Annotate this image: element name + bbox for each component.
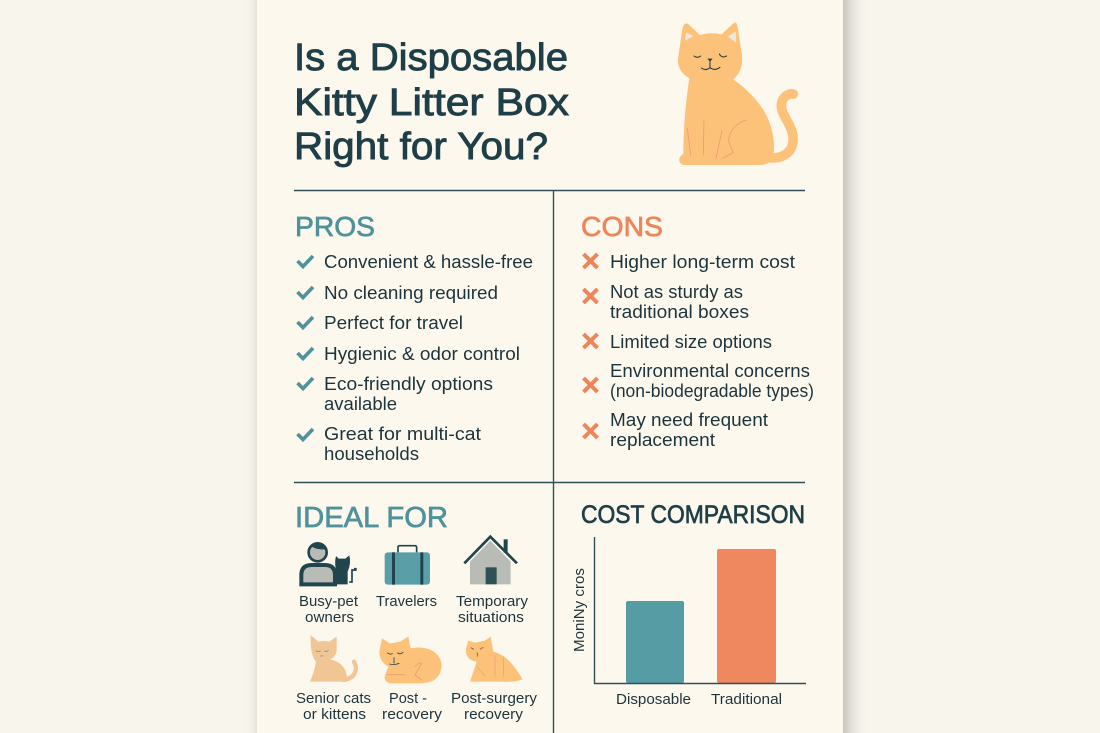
cons heading: CONS (581, 211, 663, 242)
icon: sitting cat (678, 22, 793, 165)
x axis labels: Disposable (616, 691, 691, 708)
ideal for labels: recovery (464, 706, 523, 723)
icon: resting cat (379, 637, 442, 683)
cost comparison heading: COST COMPARISON (581, 501, 805, 529)
cons list: (non-biodegradable types) (610, 381, 814, 401)
cons list: Higher long-term cost (610, 252, 795, 272)
pros list: available (324, 394, 397, 414)
ideal for labels: Temporary (456, 593, 529, 610)
ideal for labels: owners (305, 609, 354, 626)
title: Is a Disposable (294, 37, 568, 79)
pros list: Eco-friendly options (324, 374, 493, 394)
ideal for labels: situations (458, 609, 524, 626)
y axis label: MoniNy cros (571, 568, 588, 652)
icon: house (464, 537, 517, 584)
dividers (294, 190, 805, 733)
ideal for labels (296, 593, 538, 723)
cons list: traditional boxes (610, 302, 749, 322)
title (294, 37, 569, 168)
title: Right for You? (294, 126, 548, 168)
cons list: Environmental concerns (610, 361, 810, 381)
panel: cons (581, 211, 814, 450)
panel: ideal for (295, 502, 538, 723)
panel: pros (295, 211, 533, 464)
ideal for labels: Post-surgery (451, 690, 538, 707)
ideal for heading: IDEAL FOR (295, 502, 448, 534)
pros checkmarks (298, 256, 313, 440)
cons list: May need frequent (610, 410, 768, 430)
bar: disposable (626, 601, 684, 683)
ideal for labels: Busy-pet (299, 593, 359, 610)
ideal for labels: Post - (389, 690, 427, 707)
x axis labels (616, 691, 782, 708)
x axis labels: Traditional (711, 691, 782, 708)
pros list: Perfect for travel (324, 313, 463, 333)
cons list: replacement (610, 430, 715, 450)
bar: traditional (717, 549, 776, 683)
pros heading: PROS (295, 211, 375, 242)
pros list: Great for multi-cat (324, 424, 481, 444)
ideal for labels: recovery (382, 706, 443, 723)
icon: suitcase (385, 546, 430, 585)
pros list: Hygienic & odor control (324, 344, 520, 364)
ideal for labels: or kittens (303, 706, 366, 723)
panel: cost comparison (571, 501, 806, 708)
cons list: Limited size options (610, 332, 772, 352)
ideal for labels: Travelers (376, 593, 437, 610)
cons list: Not as sturdy as (610, 282, 743, 302)
pros list: households (324, 444, 419, 464)
pros list: Convenient & hassle-free (324, 252, 533, 272)
pros list: No cleaning required (324, 283, 498, 303)
pros list (324, 252, 533, 464)
ideal for labels: Senior cats (296, 690, 371, 707)
icon: pet owner with cat (301, 543, 357, 584)
title: Kitty Litter Box (294, 82, 569, 124)
cons list (610, 252, 814, 450)
icon: recovering cat (466, 637, 523, 682)
cons crosses (584, 254, 598, 438)
icon: senior cat (310, 635, 356, 682)
chart axes (594, 537, 806, 684)
